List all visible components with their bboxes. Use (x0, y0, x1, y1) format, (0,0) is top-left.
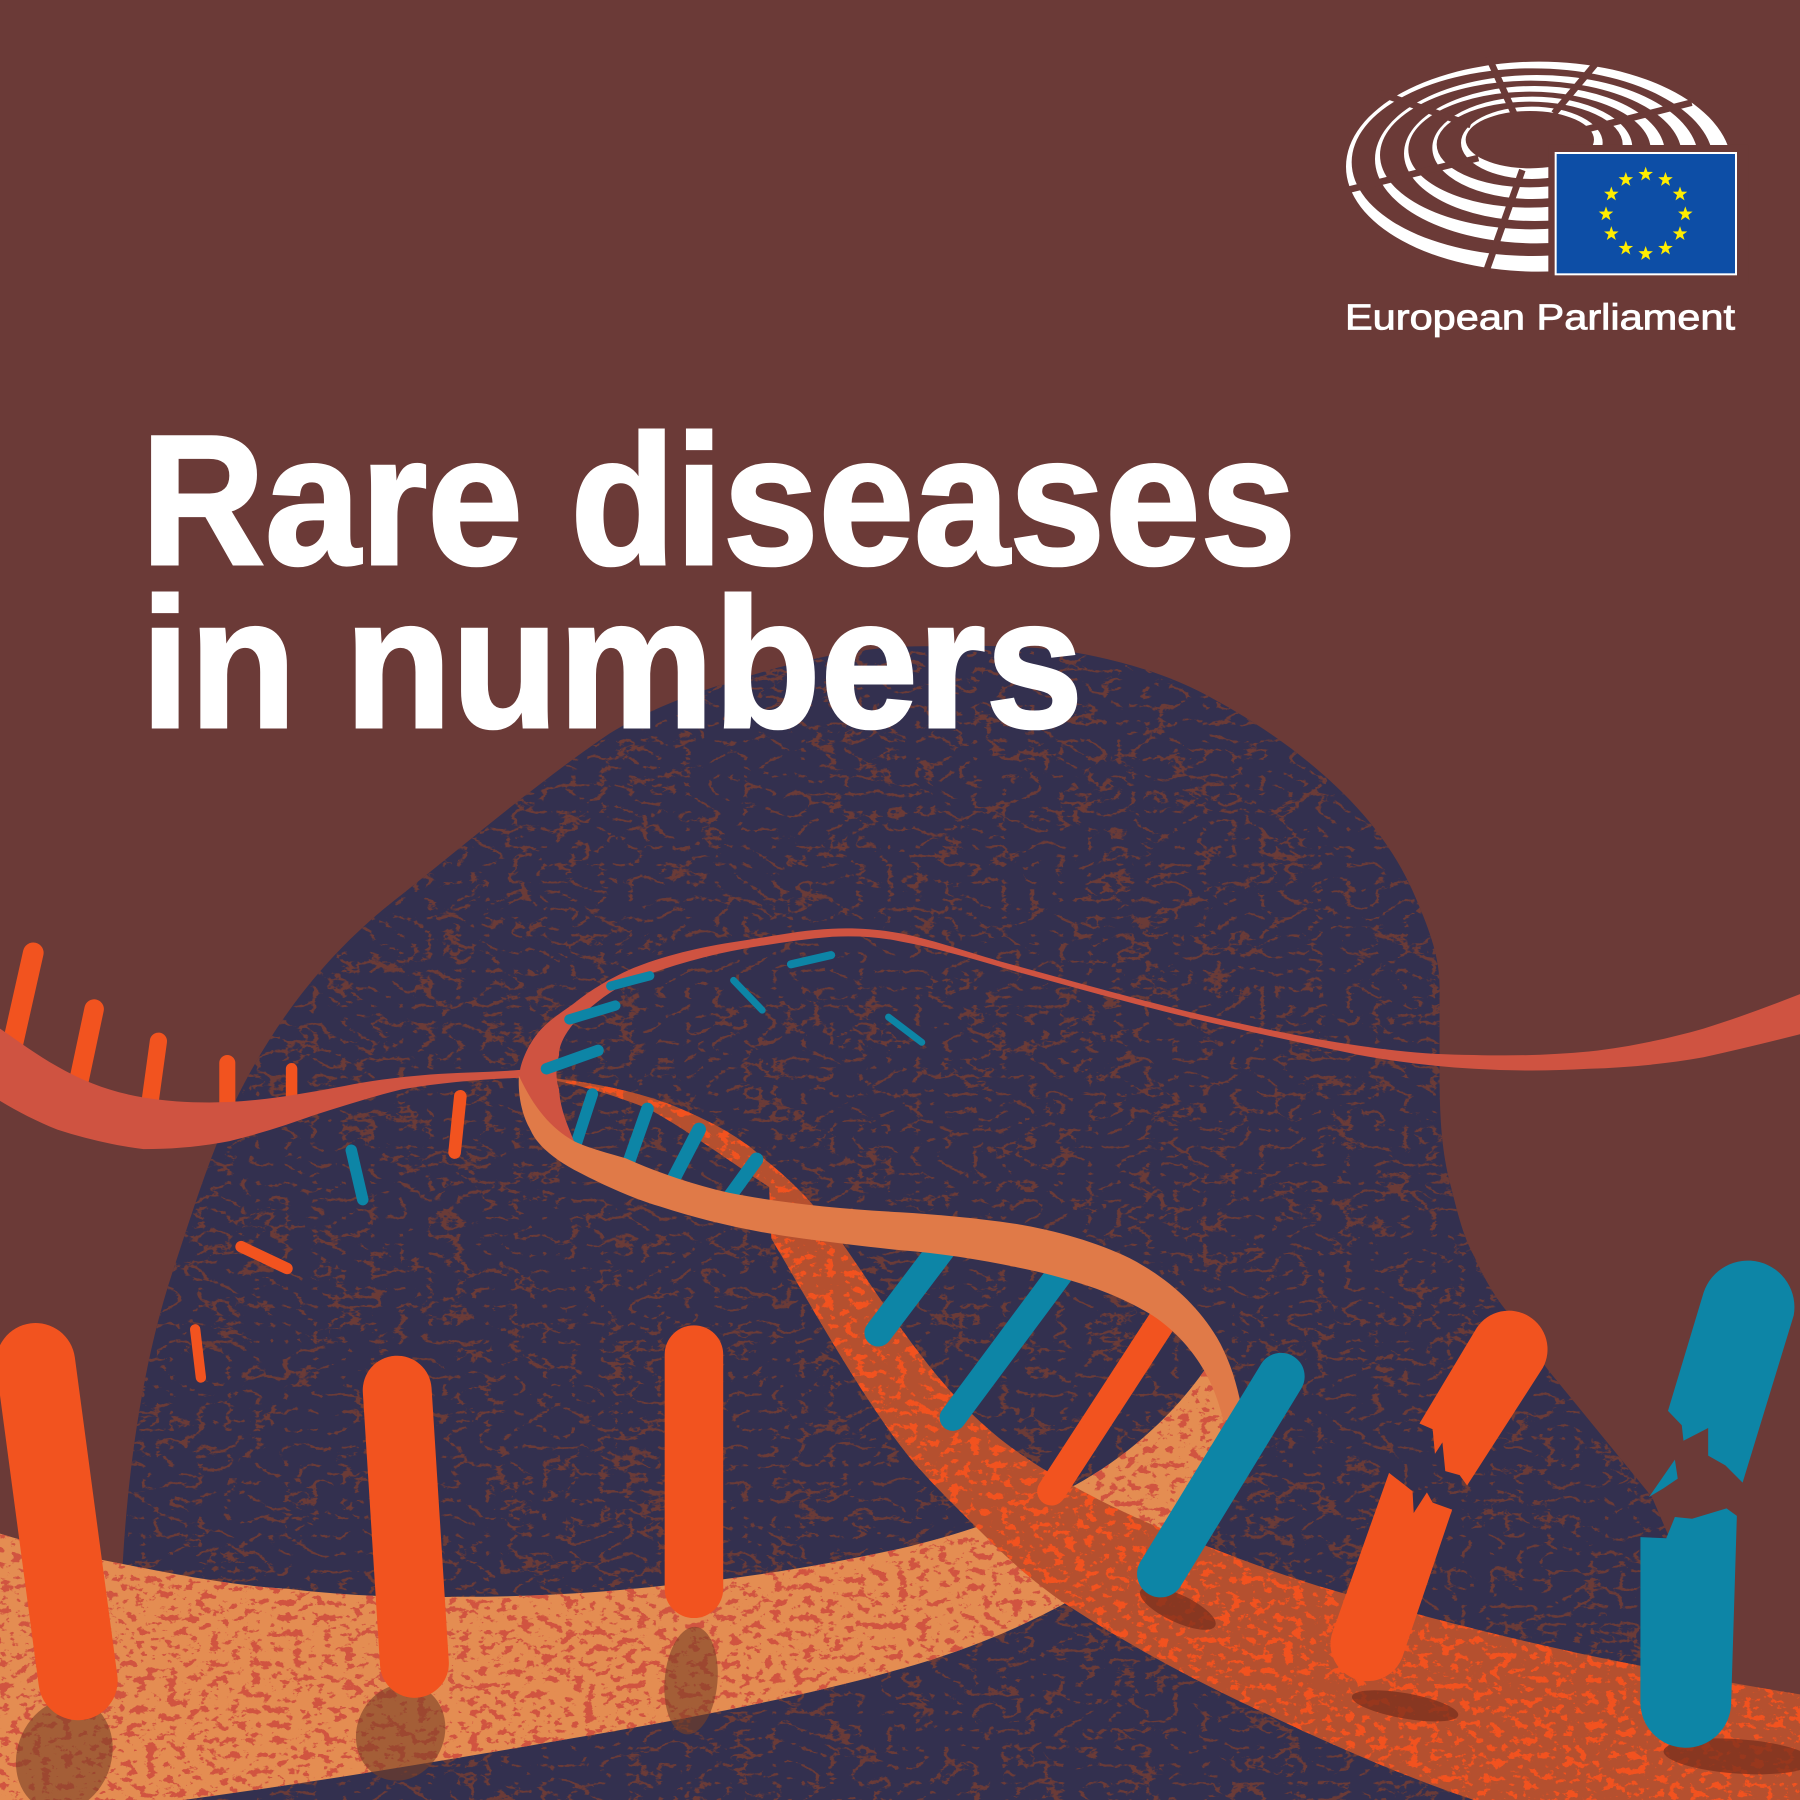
dark orange ribbon (517, 1068, 1800, 1800)
rungs passing behind the orange strand (576, 1094, 1169, 1491)
teal rungs on the red strand (546, 976, 650, 1069)
bar shadows (0, 1578, 1800, 1800)
hemicycle emblem (1346, 57, 1748, 285)
European Parliament logo (1345, 57, 1748, 337)
broken orange bar (1330, 1311, 1548, 1681)
red strand (0, 928, 1800, 1149)
light orange ribbon (0, 1366, 1251, 1800)
large teal bar (1161, 1376, 1281, 1574)
large orange bars (36, 1355, 694, 1681)
title: in numbers (141, 561, 1083, 767)
broken teal bar (1640, 1261, 1794, 1748)
short orange bars on the left strand (13, 953, 292, 1111)
title: Rare diseases (141, 398, 1296, 604)
illustration: DNA strands over textured shape (0, 637, 1800, 1800)
floating fragments (195, 955, 922, 1378)
title (141, 398, 1296, 767)
orange strand (519, 1076, 1241, 1422)
textured navy blob (115, 637, 1733, 1800)
logo wordmark: European Parliament (1345, 296, 1735, 337)
EU flag (1556, 153, 1736, 274)
